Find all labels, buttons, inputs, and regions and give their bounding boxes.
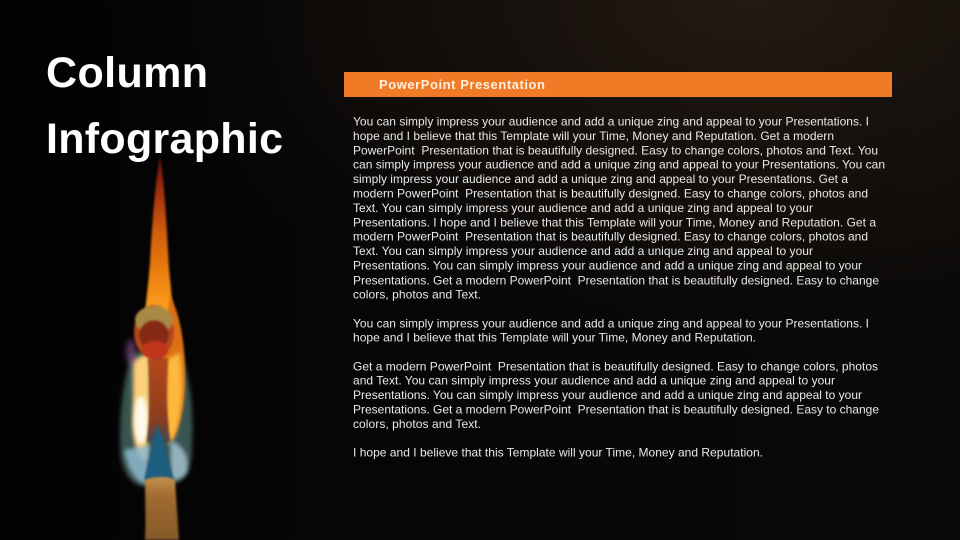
charred stem xyxy=(147,358,170,442)
bright flame core xyxy=(134,396,148,444)
title line one: Column xyxy=(46,49,208,97)
text block: paragraph 3: and Text. You can simply impress your audience and add a unique zing and appeal to your xyxy=(353,374,835,388)
text block: paragraph 1: You can simply impress your audience and add a unique zing and appeal to your Presentations. I xyxy=(353,114,869,128)
text block: paragraph 3: colors, photos and Text. xyxy=(353,417,481,431)
text block: paragraph 4: I hope and I believe that this Template will your Time, Money and Reputation. xyxy=(353,446,763,460)
match head xyxy=(134,305,174,359)
text block: paragraph 1: simply impress your audience and add a unique zing and appeal to your Presentations. Get a xyxy=(353,172,848,186)
lower pale blue flame xyxy=(124,445,150,484)
text block: paragraph 1: colors, photos and Text. xyxy=(353,288,481,302)
text block: paragraph 1: hope and I believe that this Template will your Time, Money and Reputation. Get a modern xyxy=(353,129,834,143)
text block: paragraph 2: You can simply impress your audience and add a unique zing and appeal to your Presentations. I xyxy=(353,316,869,330)
banner label: PowerPoint Presentation xyxy=(379,77,545,92)
right yellow flame xyxy=(166,352,182,442)
blue flame cone xyxy=(144,424,174,480)
header banner xyxy=(344,72,892,97)
text block: paragraph 1: Presentations. You can simply impress your audience and add a unique zing and appeal to your xyxy=(353,258,862,272)
text block: paragraph 3: Presentations. You can simply impress your audience and add a unique zing and appeal to your xyxy=(353,388,862,402)
upper orange flame xyxy=(145,155,172,320)
left purple haze xyxy=(126,339,136,365)
text block: paragraph 3 xyxy=(353,360,879,431)
text block: paragraph 3: Get a modern PowerPoint Presentation that is beautifully designed. Easy to change colors, photos xyxy=(353,360,878,374)
title xyxy=(46,49,283,163)
text block: paragraph 2 xyxy=(353,316,869,344)
text block: paragraph 1: modern PowerPoint Presentation that is beautifully designed. Easy to change colors, photos and xyxy=(353,230,868,244)
outer blue flame glow xyxy=(120,352,193,486)
title line two: Infographic xyxy=(46,115,283,163)
text block: paragraph 1: can simply impress your audience and add a unique zing and appeal to your Presentations. You can xyxy=(353,158,885,172)
text block: paragraph 1: Presentations. I hope and I believe that this Template will your Time, Money and Reputation. Get a xyxy=(353,216,876,230)
text block: paragraph 1: Text. You can simply impress your audience and add a unique zing and appeal to your xyxy=(353,244,813,258)
text block: paragraph 3: Presentations. Get a modern PowerPoint Presentation that is beautifully designed. Easy to change xyxy=(353,402,879,416)
text block: paragraph 1: modern PowerPoint Presentation that is beautifully designed. Easy to change colors, photos and xyxy=(353,186,868,200)
right orange flame xyxy=(162,295,185,445)
image: burning match xyxy=(120,155,193,540)
text block: paragraph 1: Presentations. Get a modern PowerPoint Presentation that is beautifully designed. Easy to change xyxy=(353,274,879,288)
text block: paragraph 1: PowerPoint Presentation that is beautifully designed. Easy to change colors, photos and Text. You xyxy=(353,144,878,158)
text block: paragraph 1: Text. You can simply impress your audience and add a unique zing and appeal to your xyxy=(353,201,813,215)
text block: paragraph 2: hope and I believe that this Template will your Time, Money and Reputation. xyxy=(353,330,756,344)
text block: paragraph 1 xyxy=(353,114,885,302)
match stick xyxy=(145,477,179,540)
left yellow flame xyxy=(133,352,150,461)
